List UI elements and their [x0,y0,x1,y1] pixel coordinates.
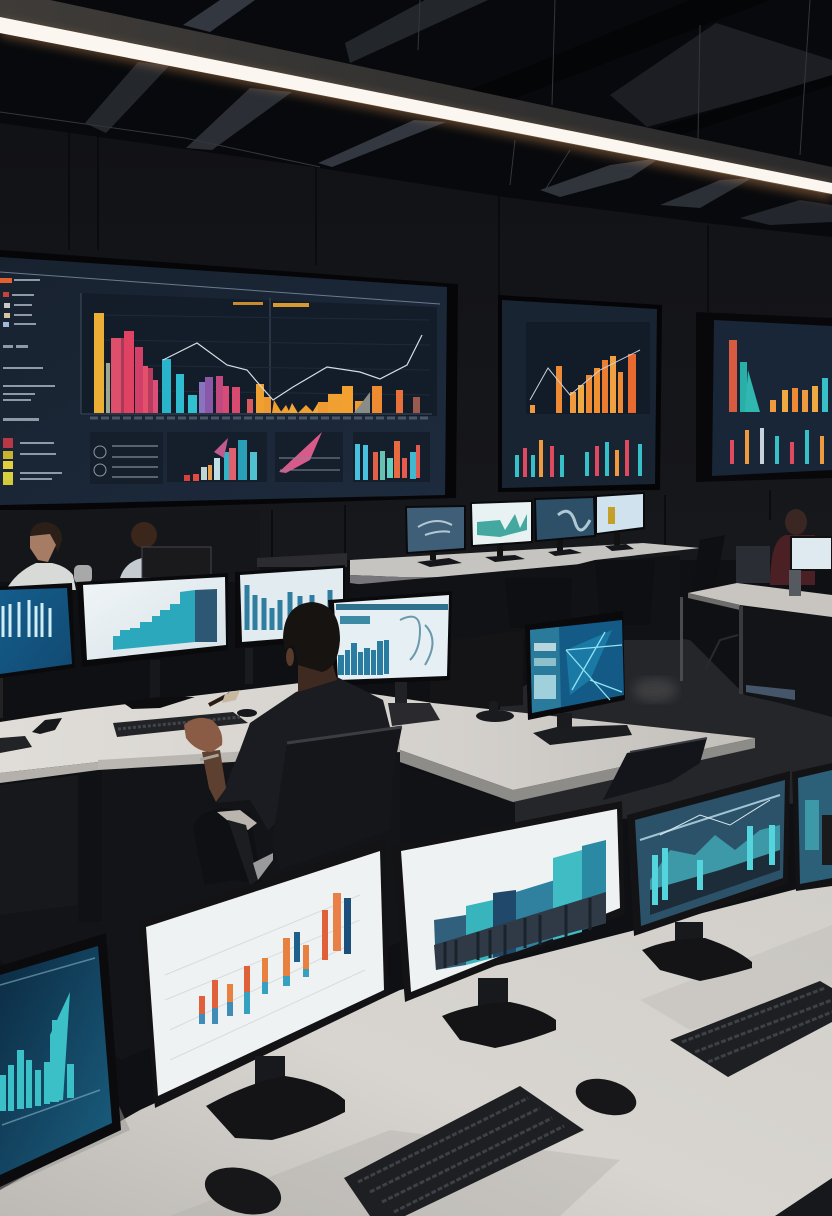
monitor row: dashboard behind worker [328,591,452,726]
front monitor: orange and blue chart [139,840,389,1140]
front monitor: far-left teal [0,933,130,1190]
bar chart: front monitor [434,840,606,970]
bar chart: third screen [729,340,828,412]
bar chart: monitor [113,589,217,650]
bar chart: far-left monitor [0,992,74,1111]
back-left workers [0,510,347,590]
bar chart: main [94,313,420,413]
floor [500,630,832,830]
neck [298,665,337,692]
lower mini panels [90,432,430,484]
front monitor: teal dashboard [627,771,790,981]
left sidebar data [0,278,62,485]
torso and arm [217,677,390,830]
right desk with worker [688,509,832,717]
legs [193,808,262,885]
monitor: blue geometric [525,611,632,745]
axis labels [90,416,430,420]
keyboard: front center [344,1086,584,1216]
rear monitors [405,492,645,567]
bar chart: front monitor [165,893,365,1060]
mouse: center [572,1073,640,1121]
front desk surface [0,880,832,1216]
front monitor: right edge [792,763,832,891]
third wall screen [696,312,832,482]
rear desk [350,543,700,681]
big wall screen [0,250,458,512]
worker at back right [770,509,815,585]
hair [283,602,340,672]
central worker [184,602,390,885]
ceiling light fixture [0,0,832,200]
central chair [217,727,402,885]
monitor row: white bars [77,573,228,709]
mouse: left [200,1160,286,1216]
wall panels [69,125,770,575]
middle keyboards and mice [0,690,514,753]
lower room shadow [0,800,500,1060]
hand [184,718,222,752]
rear chairs [430,535,725,712]
second wall screen [498,295,662,492]
main chart panel [81,293,437,416]
worker left [6,522,92,590]
line chart overlay [163,335,422,400]
monitor row: white with teal spikes [235,565,345,684]
monitor row: left blue [0,583,75,718]
bar chart: second screen [530,350,640,413]
keyboard: front right [670,981,832,1077]
ceiling [0,0,832,237]
front monitor: big bars [392,801,625,1048]
bar chart: monitor [338,640,389,675]
worker middle [120,522,157,578]
ear [286,648,294,666]
bar chart: front monitor [650,800,780,915]
right-side chair [603,738,707,800]
middle desk surface [0,683,755,922]
forearm [202,750,226,802]
